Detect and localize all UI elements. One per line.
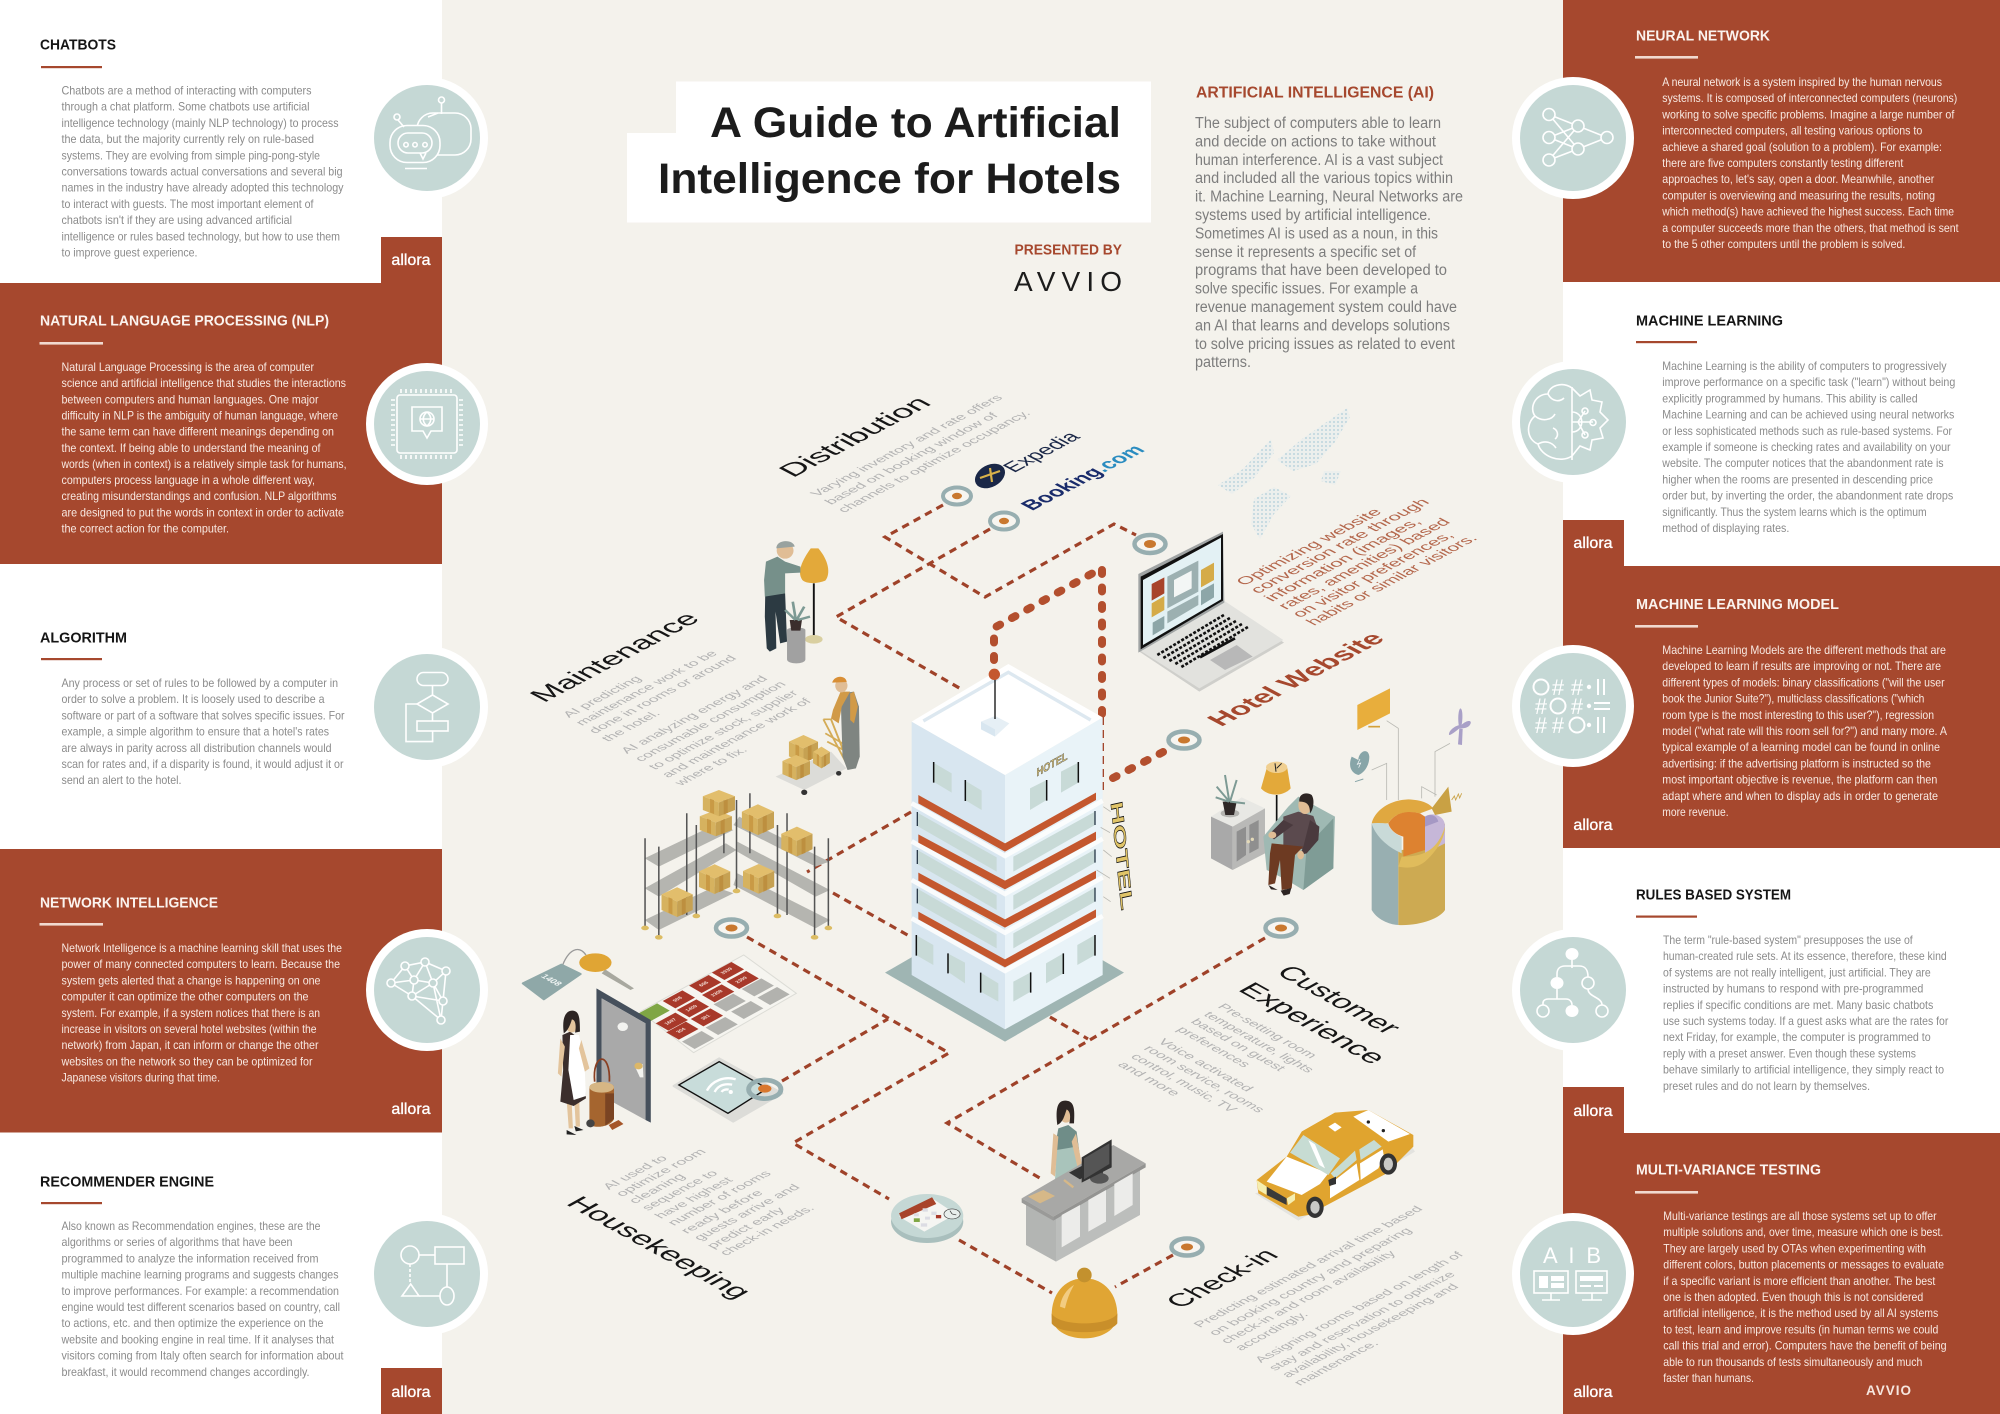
text: recommender engine body: website and booking engine in real time. If it analyses that [61, 1332, 335, 1346]
text: machine learning body [1661, 359, 1955, 535]
text: multi-variance testing body: call this trial and error). Computers have the benefit of being [1663, 1339, 1947, 1353]
panel: rules based system [1563, 848, 2000, 1133]
orange stripes [918, 793, 1096, 967]
text: machine learning model body: advertising: if the advertising platform is instructed so the [1662, 756, 1931, 770]
text: rules based system body: replies if specific conditions are met. Many basic chatbots [1663, 998, 1933, 1012]
illustration: room status grid [637, 955, 796, 1053]
label: check-in: availability, housekeeping and [1278, 1282, 1462, 1379]
label: check-in: check-in and room availability [1217, 1248, 1400, 1345]
illustration: shelving with boxes [641, 790, 832, 940]
text: NLP body: between computers and human languages. One major [62, 392, 318, 406]
panel: machine learning [1563, 282, 2000, 566]
text: machine learning body: improve performance on a specific task ("learn") without being [1662, 375, 1955, 389]
label: check-in: on booking country and preparing [1205, 1226, 1415, 1337]
label: maintenance: and maintenance work of [658, 696, 815, 779]
text: machine learning body: significantly. Thus the system learns which is the optimum [1662, 505, 1927, 519]
label: customer experience: control, music, TV [1127, 1052, 1241, 1115]
text: multi-variance testing body: different colors, button placements or messages to evaluate [1663, 1258, 1944, 1272]
icon: A/B testing monitors [1512, 1213, 1634, 1335]
connector lines [747, 505, 1265, 1293]
text: NLP body: creating misunderstandings and confusion. NLP algorithms [62, 489, 336, 503]
text block: artificial intelligence: Sometimes AI is used as a noun, in this [1195, 225, 1438, 242]
label: maintenance: maintenance work to be [572, 649, 721, 727]
text block: artificial intelligence: an AI that learns and develops solutions [1195, 317, 1450, 334]
illustration: room status grid: 606 [698, 981, 711, 988]
label: housekeeping [560, 1147, 818, 1302]
label: customer experience [1114, 961, 1408, 1115]
illustration: room status grid: 2309 [734, 976, 750, 984]
text: machine learning body: order but, by inverting the order, the abandonment rate drops [1662, 489, 1953, 503]
text: rules based system body: instructed by humans to respond with pre-programmed [1663, 982, 1923, 996]
label: hotel website: Hotel Website [1200, 628, 1391, 730]
panel: chatbots [0, 0, 442, 283]
text: algorithm body: Any process or set of rules to be followed by a computer in [62, 676, 338, 690]
text: chatbots body: names in the industry have already adopted this technology [62, 181, 344, 195]
text block: artificial intelligence: programs that have been developed to [1195, 262, 1447, 279]
label: hotel website: rates, amenities) based [1275, 516, 1455, 612]
label: customer experience: Experience [1232, 978, 1394, 1068]
heading: neural network: NEURAL NETWORK [1636, 28, 1770, 44]
illustration: room status grid: 304 [675, 1027, 688, 1034]
text block: artificial intelligence [1195, 84, 1463, 371]
text: machine learning model body: book the Junior Suite?"), multiclass classifications ("which [1662, 692, 1924, 706]
icon: chatbots [366, 77, 488, 199]
panel: multi-variance testing [1563, 1133, 2000, 1414]
text: network intelligence body [61, 941, 342, 1085]
text block: artificial intelligence: to solve pricing issues as related to event [1195, 336, 1456, 353]
label: housekeeping: Housekeeping [560, 1192, 758, 1302]
text: network intelligence body: Network Intelligence is a machine learning skill that uses the [62, 941, 342, 955]
text: network intelligence body: websites on the network so they can be optimized for [61, 1054, 313, 1068]
label: customer experience: and more [1114, 1060, 1184, 1098]
hotel small sign: HOTEL [1037, 750, 1067, 780]
label: hotel website: conversion rate through [1247, 496, 1434, 596]
title text [658, 99, 1121, 203]
text block: artificial intelligence: solve specific issues. For example a [1195, 281, 1418, 298]
label: customer experience: temperature, lights [1200, 1010, 1318, 1075]
text: network intelligence body: system. For example, if a system notices that there is an [62, 1006, 320, 1020]
text: network intelligence body: power of many connected computers to learn. Because the [62, 957, 340, 971]
icon: machine learning model symbols: # [1535, 694, 1548, 719]
text: neural network body: to the 5 other computers until the problem is solved. [1662, 237, 1905, 251]
icon: machine learning model symbols: # [1535, 713, 1548, 738]
label: distribution: Distribution [772, 393, 938, 481]
label: check-in: stay and reservation to optimize [1265, 1270, 1459, 1372]
label: maintenance: where to fix. [670, 745, 751, 788]
title text: Intelligence for Hotels [658, 155, 1121, 203]
label: customer experience: room service, rooms [1140, 1044, 1268, 1114]
label: maintenance [523, 608, 815, 788]
text: recommender engine body: to actions, etc. and then optimize the experience on the [62, 1316, 324, 1330]
text: neural network body: approaches to, let's say, open a door. Meanwhile, another [1662, 172, 1934, 186]
label: distribution: Varying inventory and rate offers [807, 393, 1006, 498]
label: hotel website: Optimizing website [1233, 506, 1386, 588]
text: chatbots body: the data, but the majority currently rely on rule-based [62, 132, 314, 146]
text: NLP body: difficulty in NLP is the ambiguity of human language, where [62, 408, 338, 422]
illustration: calendar disc [891, 1194, 963, 1243]
text: machine learning body: Machine Learning is the ability of computers to progressively [1662, 359, 1947, 373]
illustration: wifi tablet [674, 1058, 782, 1122]
text block: artificial intelligence: systems used by artificial intelligence. [1195, 207, 1431, 224]
title text: A Guide to Artificial [710, 99, 1121, 147]
heading: multi-variance testing: MULTI-VARIANCE TESTING [1636, 1162, 1821, 1178]
logo: expedia: Expedia [998, 429, 1086, 475]
heading: NLP: NATURAL LANGUAGE PROCESSING (NLP) [40, 312, 329, 330]
text: rules based system body: behave similarly to artificial intelligence, they simply react to [1663, 1063, 1944, 1077]
text: NLP body [61, 360, 346, 536]
illustration: room status grid: 2308 [710, 989, 725, 998]
text: machine learning model body: developed to learn if results are improving or not. There are [1662, 659, 1941, 673]
text: neural network body: systems. It is composed of interconnected computers (neurons) [1662, 91, 1957, 105]
text: algorithm body: software or part of a software that solves specific issues. For [62, 708, 344, 722]
text: rules based system body: preset rules and do not learn by themselves. [1663, 1079, 1870, 1093]
text: network intelligence body: computer it can optimize the other computers on the [62, 990, 309, 1004]
text: machine learning model body: Machine Learning Models are the different methods that are [1662, 643, 1946, 657]
label: check-in: maintenance. [1290, 1339, 1382, 1387]
window bands [917, 812, 1095, 948]
text block: artificial intelligence: it. Machine Learning, Neural Networks are [1195, 189, 1463, 206]
logo tab: allora: allora [1573, 1103, 1613, 1120]
text: chatbots body: Chatbots are a method of interacting with computers [62, 84, 312, 98]
illustration: taxi [1255, 1110, 1415, 1221]
illustration: hotel building [885, 664, 1136, 1042]
label: customer experience: Customer [1270, 961, 1408, 1038]
text: neural network body: a computer succeeds more than the others, that method is sent [1662, 221, 1959, 235]
text: recommender engine body: engine would test different scenarios based on country, call [62, 1300, 340, 1314]
text: neural network body: A neural network is a system inspired by the human nervous [1662, 75, 1942, 89]
heading: algorithm: ALGORITHM [40, 630, 127, 646]
text: NLP body: are designed to put the words in context in order to activate [62, 505, 344, 519]
text: machine learning body: explicitly programmed by humans. This ability is called [1662, 391, 1918, 405]
panel: network intelligence [0, 849, 442, 1132]
text: multi-variance testing body: able to run thousands of tests simultaneously and much [1663, 1355, 1922, 1369]
text: algorithm body: order to solve a problem. It is loosely used to describe a [62, 692, 325, 706]
text: recommender engine body: multiple machine learning programs and suggests changes [62, 1268, 338, 1282]
logo tab: allora: allora [391, 1384, 431, 1401]
illustration: room status grid: 908 [672, 996, 684, 1003]
vertical hotel sign [1097, 799, 1136, 912]
text: rules based system body: of systems are not really intelligent, just artificial. They are [1663, 965, 1931, 979]
text: machine learning model body: most important objective is revenue, the platform can then [1662, 773, 1937, 787]
label: housekeeping: AI used to [599, 1153, 671, 1191]
text: multi-variance testing body: multiple solutions and, over time, measure which one is best. [1663, 1225, 1943, 1239]
text: chatbots body: to improve guest experience. [62, 246, 198, 260]
label: maintenance: AI analyzing energy and [617, 674, 771, 755]
icon: machine learning brain [1512, 361, 1634, 483]
text: machine learning body: Machine Learning and can be achieved using neural networks [1662, 408, 1954, 422]
illustration: room status grid: 3939 [719, 967, 735, 975]
label: housekeeping: sequence to [638, 1168, 721, 1212]
illustration: cylinder chart with devices [1350, 688, 1471, 925]
icon: machine learning model symbols: # [1552, 713, 1565, 738]
logo: allora: allora [391, 1101, 431, 1118]
logo: allora: allora [391, 252, 431, 269]
label: maintenance: Maintenance [523, 608, 706, 706]
text: NLP body: the context. If being able to understand the meaning of [62, 441, 321, 455]
text: algorithm body: scan for rates and, if a disparity is found, it would adjust it or [62, 757, 344, 771]
panel: algorithm [0, 564, 442, 849]
text block: artificial intelligence: human interference. AI is a vast subject [1195, 152, 1444, 169]
illustration: laptop [1138, 532, 1284, 692]
illustration: housekeeper, door and vacuum [558, 988, 651, 1135]
text: machine learning model body: different types of models: binary classifications ("will the user [1662, 675, 1945, 689]
label: customer experience: based on guest [1187, 1017, 1289, 1073]
text: network intelligence body: network) from Japan, it can inform or change the other [62, 1038, 318, 1052]
label: hotel website: habits or similar visitors. [1303, 533, 1482, 628]
panel: machine learning model [1563, 566, 2000, 848]
label: distribution: based on booking window of [821, 410, 1002, 506]
text: multi-variance testing body [1663, 1209, 1947, 1385]
label: check-in: Assigning rooms based on length of [1251, 1250, 1467, 1364]
heading: rules based system: RULES BASED SYSTEM [1636, 886, 1791, 904]
icon: algorithm flowchart [366, 646, 488, 768]
heading: network intelligence: NETWORK INTELLIGENCE [40, 894, 218, 912]
text: multi-variance testing body: to test, learn and improve results (in human terms we could [1663, 1322, 1938, 1336]
icon: neural network [1512, 77, 1634, 199]
text: NLP body: Natural Language Processing is the area of computer [62, 360, 314, 374]
text: machine learning model body: adapt where and when to display ads in order to generate [1662, 789, 1938, 803]
text block: artificial intelligence: The subject of computers able to learn [1195, 115, 1441, 132]
text: chatbots body: intelligence or rules based technology, but how to use them [62, 229, 340, 243]
text: machine learning model body: typical example of a learning model can be found in online [1662, 740, 1940, 754]
text: neural network body: achieve a shared goal (solution to a problem). For example: [1662, 140, 1942, 154]
label: housekeeping: predict early [703, 1205, 789, 1250]
logo: allora: allora [1573, 1384, 1613, 1401]
logo: allora: allora [1573, 817, 1613, 834]
text: network intelligence body: Japanese visitors during that time. [62, 1071, 220, 1085]
targets [716, 488, 1296, 1256]
logo tab: allora [1563, 520, 1624, 566]
text: rules based system body: The term "rule-based system" presupposes the use of [1663, 933, 1913, 947]
logo tab: allora [1563, 1087, 1624, 1133]
illustration: maintenance man with lamp [764, 541, 828, 663]
text: NLP body: computers process language in a whole different way, [62, 473, 315, 487]
label: housekeeping: number of rooms [664, 1169, 775, 1227]
text: rules based system body [1663, 933, 1948, 1093]
logo: avvio small: AVVIO [1866, 1383, 1911, 1398]
illustration: service bell [1052, 1268, 1117, 1338]
label: customer experience: Pre-setting room [1214, 1002, 1320, 1060]
text: machine learning body: or less sophisticated methods such as rule-based systems. For [1662, 424, 1952, 438]
label: housekeeping: optimize room [612, 1147, 709, 1198]
text: NLP body: science and artificial intelligence that studies the interactions [62, 376, 346, 390]
text: network intelligence body: increase in visitors on several hotel websites (within the [62, 1022, 317, 1036]
illustration: reception desk and receptionist [1022, 1101, 1146, 1262]
text block: artificial intelligence: and decide on actions to take without [1195, 133, 1437, 150]
text: multi-variance testing body: Multi-variance testings are all those systems set up to offer [1663, 1209, 1937, 1223]
text: algorithm body: send an alert to the hotel. [62, 773, 182, 787]
label: distribution: channels to optimize occupancy. [834, 408, 1034, 514]
text: NLP body: the correct action for the computer. [62, 522, 229, 536]
label: housekeeping: have highest [651, 1175, 737, 1220]
logo: booking.com: Booking.com [1016, 442, 1150, 513]
icon: recommender engine [366, 1213, 488, 1335]
text: recommender engine body: breakfast, it would recommend changes accordingly. [62, 1365, 310, 1379]
text: rules based system body: reply with a preset answer. Even though these systems [1663, 1046, 1916, 1060]
title panel [627, 82, 1151, 222]
text: neural network body: there are five computers constantly testing different [1662, 156, 1904, 170]
label: maintenance: to optimize stock, supplier [645, 688, 802, 771]
logo: expedia [971, 429, 1086, 493]
label: check-in: Predicting estimated arrival time based [1190, 1204, 1426, 1329]
text: machine learning body: example if someone is checking rates and availability on your [1662, 440, 1951, 454]
text: machine learning model body: room type is the most interesting to this user?"), regression [1662, 708, 1934, 722]
base windows [916, 935, 1095, 1002]
icon: machine learning model symbols: # [1571, 675, 1584, 700]
label: maintenance: the hotel. [598, 709, 664, 743]
logo: avvio: AVVIO [1014, 266, 1122, 297]
label: housekeeping: cleaning [625, 1172, 689, 1205]
text: machine learning body: website. The computer notices that the abandonment rate is [1661, 456, 1944, 470]
text block: artificial intelligence: and included all the various topics within [1195, 170, 1453, 187]
text: multi-variance testing body: faster than humans. [1663, 1371, 1754, 1385]
label: housekeeping: guests arrive and [690, 1182, 803, 1242]
text: chatbots body: through a chat platform. Some chatbots use artificial [62, 100, 310, 114]
illustration: key tag and key [523, 950, 634, 999]
heading: machine learning: MACHINE LEARNING [1636, 312, 1783, 330]
label: check-in: accordingly. [1231, 1310, 1312, 1352]
text: neural network body: working to solve specific problems. Imagine a large number of [1661, 107, 1955, 121]
label: check-in [1159, 1204, 1467, 1387]
illustration: room status grid: 381 [700, 1014, 713, 1021]
text: network intelligence body: system gets alerted that a change is happening on one [62, 973, 321, 987]
icon: rules based tree [1512, 929, 1634, 1051]
illustration: guest in armchair with cabinet and lamp [1211, 762, 1335, 896]
text: multi-variance testing body: one is then adopted. Even though this is not considered [1663, 1290, 1923, 1304]
icon: machine learning model symbols [1512, 645, 1634, 767]
text block: artificial intelligence: patterns. [1195, 354, 1251, 371]
icon: network intelligence [366, 929, 488, 1051]
text: chatbots body: to interact with guests. The most important element of [62, 197, 314, 211]
text: machine learning model body [1662, 643, 1947, 819]
text: chatbots body: chatbots isn't if they are using advanced artificial [62, 213, 292, 227]
illustration: room status grid: 1697 [663, 1018, 679, 1026]
illustration: man with trolley and boxes [776, 677, 860, 795]
illustration: room status grid: 1409 [684, 1004, 700, 1013]
illustration: key tag and key: 1408 [539, 973, 565, 987]
icon: natural language processing chip [366, 363, 488, 485]
text: algorithm body [62, 676, 344, 787]
icon: machine learning model symbols: # [1571, 694, 1584, 719]
text block: artificial intelligence: sense it represents a specific set of [1195, 244, 1417, 261]
illustration: dotted world map [1218, 408, 1350, 539]
text: machine learning body: method of displaying rates. [1662, 521, 1789, 535]
text block: artificial intelligence: revenue management system could have [1195, 299, 1457, 316]
text: multi-variance testing body: artificial intelligence, it is the method used by all AI systems [1663, 1306, 1938, 1320]
heading: chatbots: CHATBOTS [40, 36, 116, 54]
label: maintenance: done in rooms or around [585, 653, 740, 735]
text: recommender engine body: programmed to analyze the information received from [62, 1251, 318, 1265]
icon: machine learning model symbols: # [1552, 675, 1565, 700]
panel: neural network [1563, 0, 2000, 282]
text: rules based system body: human-created rule sets. At its essence, therefore, these kind [1663, 949, 1947, 963]
label: hotel website [1200, 496, 1482, 730]
text: NLP body: the same term can have different meanings depending on [62, 425, 334, 439]
text: NLP body: words (when in context) is a relatively simple task for humans, [61, 457, 346, 471]
text: algorithm body: example, a simple algorithm to ensure that a hotel's rates [62, 725, 329, 739]
upper floor windows [933, 763, 1078, 810]
text: multi-variance testing body: They are largely used by OTAs when experimenting with [1663, 1241, 1926, 1255]
label: customer experience: preferences [1173, 1025, 1254, 1069]
heading: recommender engine: RECOMMENDER ENGINE [40, 1174, 214, 1190]
text: recommender engine body: visitors coming from Italy often search for information about [62, 1349, 344, 1363]
text: recommender engine body: to improve performances. For example: a recommendation [62, 1284, 339, 1298]
text block: artificial intelligence: ARTIFICIAL INTELLIGENCE (AI) [1196, 84, 1434, 102]
vertical hotel sign: HOTEL [1107, 799, 1136, 912]
label: customer experience: Voice activated [1154, 1037, 1257, 1093]
text: multi-variance testing body: if a specific variant is more efficient than another. The best [1663, 1274, 1936, 1288]
heading: machine learning model: MACHINE LEARNING MODEL [1636, 596, 1839, 613]
label: hotel website: information (images, [1261, 516, 1426, 604]
text: rules based system body: use such systems today. If a guest asks what are the rates for [1663, 1014, 1948, 1028]
text: machine learning model body: more revenue. [1662, 805, 1729, 819]
icon: A/B testing monitors: A I B [1543, 1243, 1601, 1268]
presented by: PRESENTED BY [1014, 242, 1122, 258]
text: neural network body [1661, 75, 1959, 251]
text: neural network body: which method(s) have achieved the highest success. Each time [1661, 205, 1954, 219]
text: chatbots body: systems. They are evolving from simple ping-pong-style [62, 148, 320, 162]
text: chatbots body: intelligence technology (mainly NLP technology) to process [62, 116, 338, 130]
label: distribution [772, 393, 1034, 514]
label: housekeeping: check-in needs. [716, 1203, 818, 1257]
text: rules based system body: next Friday, for example, the computer is programmed to [1663, 1030, 1931, 1044]
text: algorithm body: are always in parity across all distribution channels would [62, 741, 332, 755]
panel: natural language processing [0, 237, 442, 564]
label: housekeeping: ready before [677, 1188, 767, 1235]
text: machine learning body: higher when the rooms are presented in descending price [1662, 472, 1933, 486]
label: check-in: Check-in [1159, 1245, 1285, 1312]
text: chatbots body: conversations towards actual conversations and several big [62, 164, 342, 178]
logo tab: allora: allora [1573, 535, 1613, 552]
panel: recommender engine [0, 1132, 442, 1414]
text: recommender engine body: algorithms or series of algorithms that have been [62, 1235, 292, 1249]
logo tab: allora [381, 1368, 442, 1414]
text: neural network body: interconnected computers, all testing various options to [1662, 124, 1923, 138]
label: maintenance: consumable consumption [631, 679, 789, 763]
text: recommender engine body: Also known as Recommendation engines, these are the [62, 1219, 321, 1233]
label: maintenance: AI predicting [559, 674, 645, 719]
text: recommender engine body [61, 1219, 344, 1379]
text: neural network body: computer is overviewing and measuring the results, noting [1662, 188, 1935, 202]
label: hotel website: on visitor preferences, [1289, 530, 1458, 620]
text: machine learning model body: model ("what rate will this room sell for?") and many more. A [1662, 724, 1947, 738]
text: chatbots body [62, 84, 344, 260]
